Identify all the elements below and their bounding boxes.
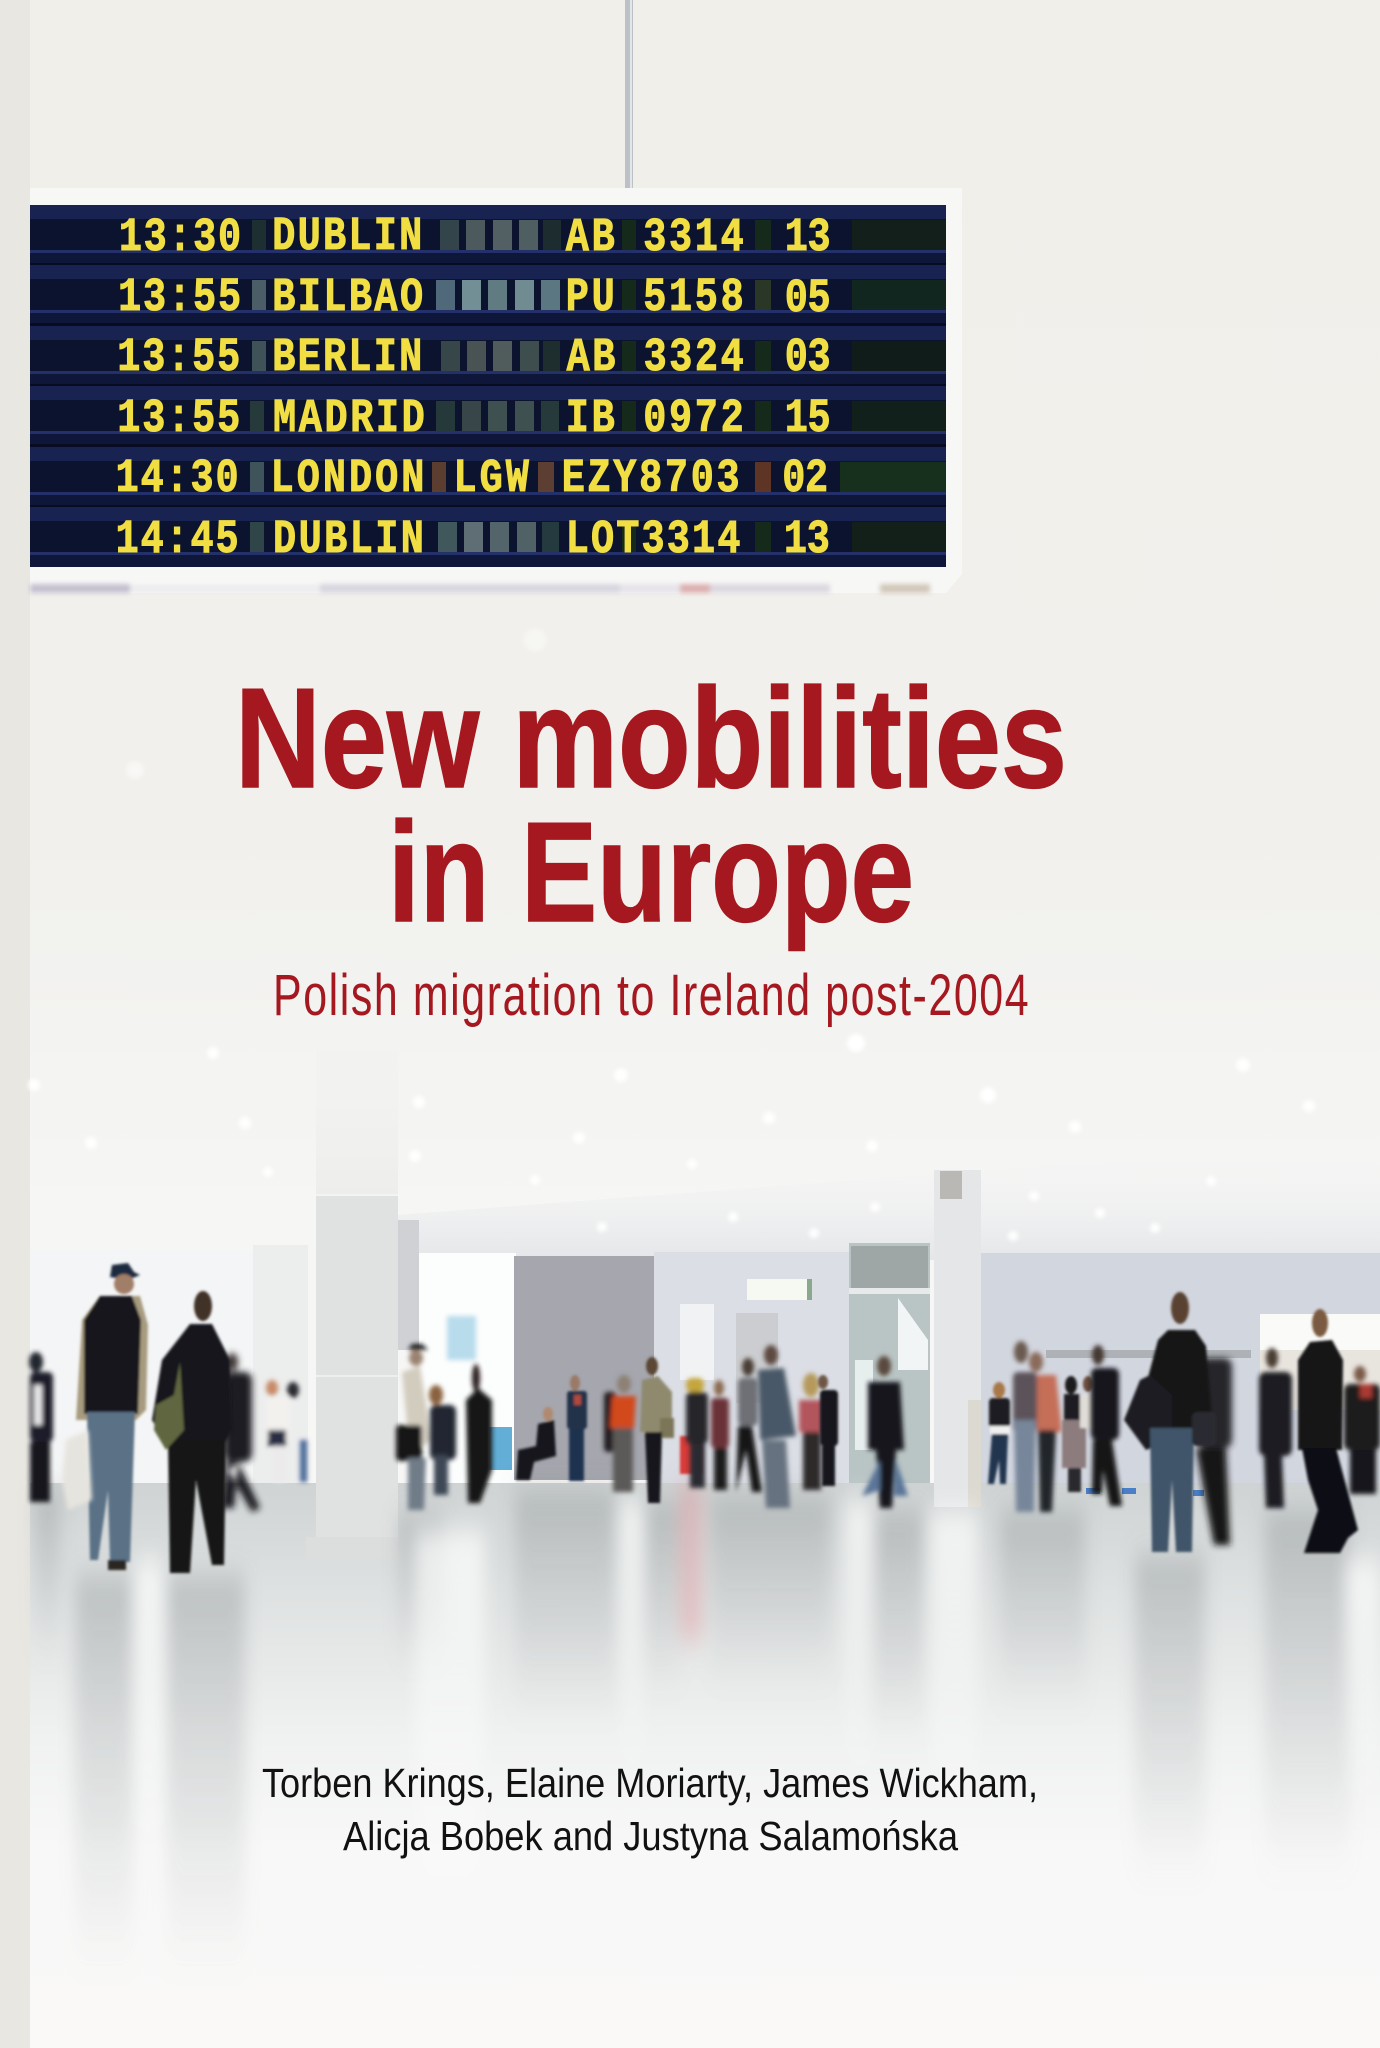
- row 6: LOT3314: [566, 513, 740, 566]
- person with dark coat right: [1259, 1348, 1292, 1508]
- row 2: BILBAO: [272, 271, 423, 324]
- authors: Alicja Bobek and Justyna Salamońska: [343, 1813, 958, 1859]
- left cover strip: [0, 0, 30, 2048]
- back wall left: [30, 1250, 308, 1485]
- red shopping bag: [680, 1436, 702, 1474]
- row 4: 13:55: [117, 392, 240, 445]
- row 4: [117, 392, 831, 445]
- row 4: 15: [785, 392, 831, 445]
- left pillar: [306, 1015, 419, 1559]
- left column behind people: [253, 1245, 308, 1483]
- authors: [262, 1760, 1038, 1859]
- concourse scene: [28, 628, 1380, 2048]
- row 2: 13:55: [118, 271, 241, 324]
- distant people in white and navy: [266, 1380, 307, 1482]
- row 4: MADRID: [273, 392, 425, 445]
- person in khaki coat: [640, 1357, 674, 1503]
- row 3: BERLIN: [272, 331, 422, 384]
- row 3: [117, 331, 831, 384]
- row 4: IB 0972: [566, 392, 744, 445]
- couple with polka dress: [1062, 1376, 1096, 1492]
- blank flap tiles: [432, 220, 561, 552]
- row 5: 02: [782, 452, 828, 505]
- departures board: [30, 188, 962, 593]
- person behind with dark coat: [222, 1353, 260, 1512]
- bright opening: [419, 1253, 516, 1485]
- striding man in black: [1298, 1309, 1358, 1553]
- woman with blond hair and pink bag: [799, 1373, 823, 1490]
- title: New mobilities: [235, 659, 1067, 818]
- centre wall: [654, 1252, 849, 1484]
- wall poster: [680, 1304, 714, 1380]
- board panel: [30, 205, 946, 567]
- grey panel door: [514, 1256, 654, 1480]
- right bright shop: [1260, 1314, 1380, 1410]
- exit sign: [747, 1279, 812, 1300]
- seated person: [516, 1407, 556, 1480]
- row 5: 14:30: [116, 452, 239, 505]
- right wall: [981, 1253, 1380, 1485]
- person with yellow collar: [686, 1378, 708, 1488]
- gaps and right side flaps: [250, 220, 946, 552]
- large man from behind: [1124, 1292, 1216, 1552]
- glass door: [849, 1243, 930, 1484]
- man in cream coat: [396, 1344, 432, 1510]
- man with olive shoulder bag: [152, 1291, 232, 1573]
- inner doorway: [736, 1313, 778, 1403]
- row 3: 13:55: [117, 331, 240, 384]
- row 6: 13: [784, 513, 830, 566]
- group of dark figures: [429, 1364, 492, 1503]
- row 2: 05: [785, 272, 831, 325]
- title: [235, 659, 1067, 952]
- far left person: [29, 1352, 53, 1502]
- man in black near door: [818, 1375, 838, 1486]
- row 1: 13:30: [119, 211, 241, 264]
- row 3: AB 3324: [567, 331, 744, 384]
- railing on right wall: [1046, 1350, 1251, 1358]
- row 6: [116, 513, 830, 566]
- row 5: [116, 452, 828, 505]
- ceiling spotlights: [28, 628, 1315, 1241]
- subtitle: Polish migration to Ireland post-2004: [273, 963, 1029, 1028]
- row 3: 03: [785, 331, 831, 384]
- row 1: AB 3314: [566, 211, 744, 264]
- blue sign in opening: [447, 1316, 476, 1360]
- shop counter blue: [489, 1427, 512, 1470]
- row bands: [30, 205, 946, 567]
- row 6: DUBLIN: [273, 513, 424, 566]
- person in orange jacket: [604, 1375, 636, 1492]
- standing guard: [567, 1375, 587, 1481]
- right pillar: [934, 1170, 981, 1507]
- board lower reflection strip: [30, 584, 930, 593]
- row 2: PU 5158: [566, 271, 744, 324]
- title: in Europe: [388, 793, 914, 952]
- woman in black top and jeans: [988, 1382, 1010, 1484]
- row 6: 14:45: [116, 513, 239, 566]
- person in salmon shirt: [1013, 1341, 1062, 1512]
- person in maroon: [711, 1380, 729, 1490]
- ceiling soffit: [398, 1140, 1380, 1260]
- row 5: LONDON LGW: [271, 452, 529, 505]
- flight rows: [116, 210, 831, 566]
- hanging pole: [625, 0, 633, 190]
- row 1: 13: [785, 211, 831, 264]
- row 2: [118, 271, 831, 325]
- row 1: [119, 210, 831, 264]
- floor reflections: [35, 1480, 1350, 1975]
- board frame: [30, 188, 962, 593]
- large man with black vest: [76, 1263, 148, 1570]
- white carrier bag: [62, 1430, 92, 1510]
- blue floor cones: [1086, 1488, 1204, 1496]
- authors: Torben Krings, Elaine Moriarty, James Wickham,: [262, 1760, 1038, 1806]
- figure behind large man: [1196, 1358, 1232, 1545]
- row 5: EZY8703: [562, 452, 740, 505]
- man in jeans at glass door: [862, 1356, 908, 1508]
- floor: [30, 1483, 1380, 2048]
- row 1: DUBLIN: [272, 210, 422, 263]
- walking man in black: [1091, 1345, 1122, 1506]
- person in blue grey coat: [758, 1345, 796, 1508]
- far right person: [1344, 1366, 1380, 1494]
- walking person in grey top: [736, 1358, 762, 1492]
- white floor streaks: [135, 1500, 1380, 1950]
